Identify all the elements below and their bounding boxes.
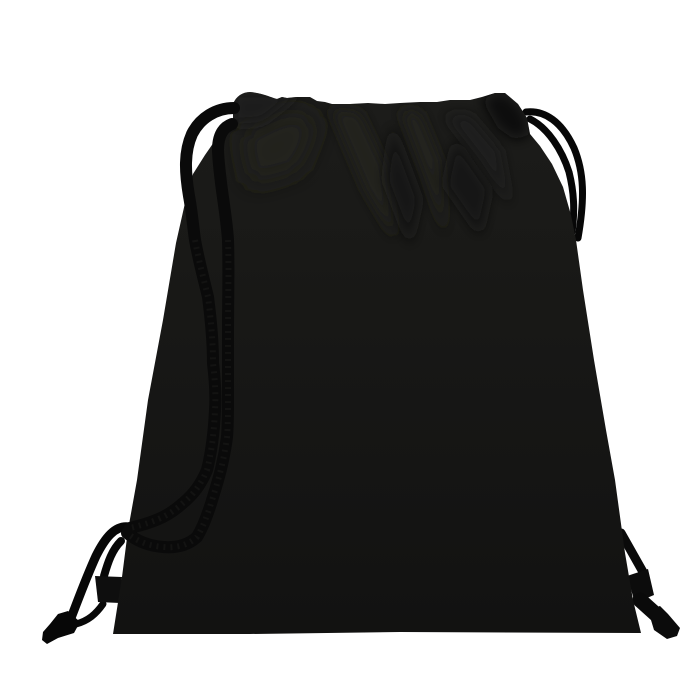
bottom left cords, tab and knot [42, 527, 129, 644]
bag body [113, 92, 641, 634]
gathered folds [234, 92, 494, 230]
gathered right ear [482, 93, 530, 140]
bottom right cord, tab and knot [621, 533, 680, 639]
left cord loop on bag [127, 108, 234, 547]
illustration: black drawstring bag [42, 92, 680, 644]
right cords behind bag [526, 112, 583, 238]
